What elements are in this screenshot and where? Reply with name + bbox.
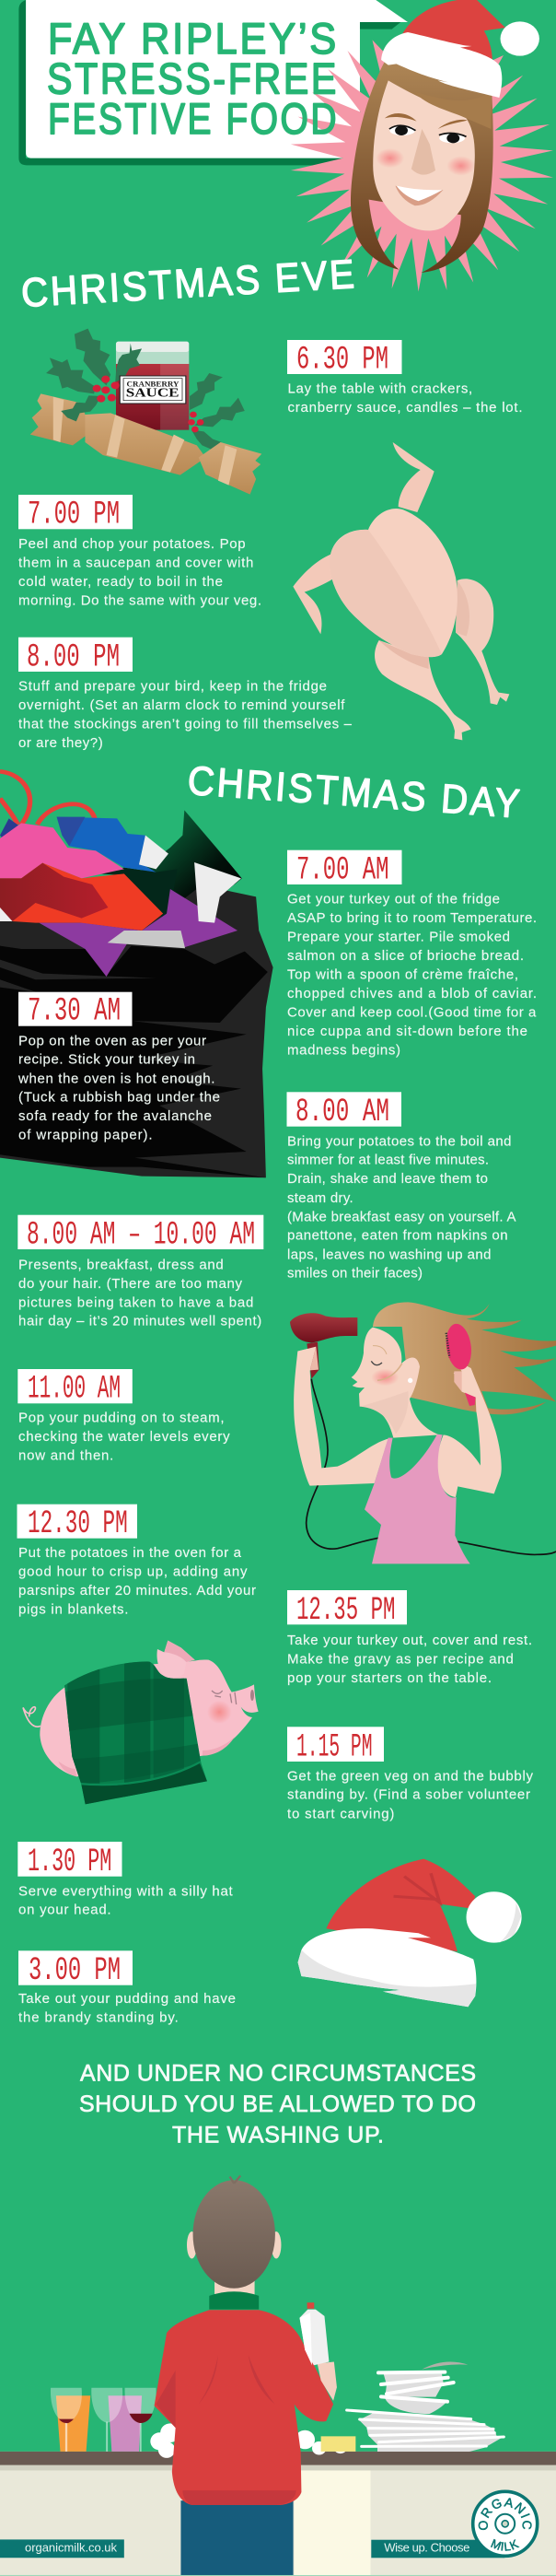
illustration: pig in a blanket (23, 1641, 259, 1809)
block: 12.30 PM (17, 1505, 256, 1617)
closing message (79, 2061, 476, 2148)
title: FAY RIPLEY’S (48, 14, 339, 63)
block: 7.00 PM: morning. Do the same with your veg. (18, 592, 261, 608)
holly and berries over cracker (61, 376, 203, 432)
block: 12.30 PM: Put the potatoes in the oven for a (18, 1545, 242, 1561)
ear (157, 1641, 195, 1678)
illustration: raw turkey (293, 442, 509, 740)
block: 8.00 PM: overnight. (Set an alarm clock to remind yourself (18, 697, 345, 713)
block: 8.00 AM: Bring your potatoes to the boil and (287, 1133, 512, 1149)
hair dryer (290, 1313, 357, 1379)
hat red (402, 0, 505, 62)
block: 7.00 PM: them in a saucepan and cover with (18, 555, 253, 570)
pig body (40, 1659, 259, 1776)
washing-up liquid bottle (299, 2302, 337, 2401)
counter and cupboards (0, 2452, 556, 2575)
block: 1.30 PM: on your head. (18, 1903, 111, 1918)
logo: Organic Milk: MILK (490, 2539, 519, 2551)
footer labels (25, 2540, 469, 2554)
block: 7.30 AM: (Tuck a rubbish bag under the (18, 1090, 220, 1106)
cheeks (376, 148, 404, 168)
block: 8.00 PM: that the stockings aren’t going to fill themselves – (18, 717, 353, 732)
schedule: Christmas Day, right column (287, 850, 537, 1821)
block: 7.00 AM: 7.00 AM (296, 851, 388, 888)
footer labels: Wise up. Choose (384, 2540, 469, 2554)
block: 6.30 PM: Lay the table with crackers, (287, 381, 472, 397)
illustration: Santa hat (298, 1859, 522, 2007)
block: 7.00 AM: ASAP to bring it to room Temperature. (287, 910, 537, 926)
face (373, 80, 475, 230)
block: 8.00 AM: simmer for at least five minutes. (287, 1153, 489, 1168)
closing message: THE WASHING UP. (172, 2122, 384, 2148)
title (47, 14, 339, 143)
block: 11.00 AM (17, 1369, 230, 1463)
block: 7.00 AM: madness begins) (287, 1042, 400, 1058)
block: 7.30 AM: Pop on the oven as per your (18, 1033, 206, 1048)
block: 8.00 AM to 10.00 AM: pictures being taken to have a bad (18, 1294, 253, 1310)
block: 7.30 AM: of wrapping paper). (18, 1128, 153, 1143)
title: FESTIVE FOOD (48, 94, 339, 143)
hair (373, 1302, 556, 1414)
title speech box (18, 0, 408, 165)
fringe (415, 92, 492, 129)
block: 11.00 AM: checking the water levels every (18, 1429, 230, 1445)
footer strip: web address (0, 2539, 124, 2558)
block: 6.30 PM: 6.30 PM (296, 341, 388, 378)
block: 1.15 PM: 1.15 PM (296, 1728, 372, 1765)
portrait: Fay Ripley in a Santa hat (291, 0, 553, 292)
block: 6.30 PM (287, 340, 523, 416)
illustration: cranberry sauce, holly and cracker (30, 329, 261, 495)
block: 8.00 AM to 10.00 AM (17, 1215, 263, 1329)
block: 8.00 AM: laps, leaves no washing up and (287, 1247, 492, 1262)
block: 8.00 AM: Drain, shake and leave them to (287, 1171, 488, 1187)
jar label (120, 376, 186, 404)
block: 8.00 AM to 10.00 AM: Presents, breakfast, dress and (18, 1257, 224, 1272)
block: 7.00 AM (287, 850, 537, 1058)
block: 8.00 AM: panettone, eaten from napkins on (287, 1228, 508, 1244)
block: 8.00 AM: smiles on their faces) (287, 1266, 423, 1282)
hair (351, 62, 493, 273)
block: 1.15 PM: Get the green veg on and the bubbly (287, 1768, 534, 1784)
jar label: SAUCE (126, 387, 180, 400)
soap suds (150, 2423, 347, 2458)
ribbon (0, 771, 95, 825)
block: 8.00 AM to 10.00 AM: hair day – it’s 20 minutes well spent) (18, 1314, 261, 1329)
footer labels: organicmilk.co.uk (25, 2540, 118, 2554)
block: 1.30 PM: 1.30 PM (28, 1844, 111, 1880)
block: 12.35 PM: pop your starters on the table. (287, 1670, 492, 1686)
bottom edge (0, 2575, 556, 2576)
block: 8.00 AM to 10.00 AM: 8.00 AM – 10.00 AM (27, 1216, 255, 1253)
block: 8.00 AM to 10.00 AM: do your hair. (There are too many (18, 1276, 243, 1292)
right arm (437, 1359, 502, 1497)
block: 8.00 AM: steam dry. (287, 1190, 353, 1206)
block: 1.15 PM: standing by. (Find a sober volunteer (287, 1787, 530, 1803)
schedule: Christmas Eve (18, 340, 523, 751)
block: 7.30 AM (17, 992, 220, 1143)
block: 7.00 AM: nice cuppa and sit-down before the (287, 1024, 527, 1039)
block: 8.00 AM: (Make breakfast easy on yourself. A (287, 1209, 515, 1224)
closing message: AND UNDER NO CIRCUMSTANCES (80, 2061, 476, 2087)
heading: Christmas Eve: CHRISTMAS EVE (20, 252, 358, 316)
face details (207, 1701, 232, 1724)
block: 3.00 PM: 3.00 PM (29, 1952, 121, 1989)
block: 12.35 PM: 12.35 PM (296, 1592, 396, 1629)
neck and face (352, 1328, 439, 1438)
block: 1.15 PM (287, 1727, 534, 1821)
illustration: woman drying her hair (290, 1302, 556, 1563)
header panel (18, 0, 553, 292)
block: 11.00 AM: now and then. (18, 1447, 113, 1463)
block: 12.30 PM: good hour to crisp up, adding any (18, 1563, 248, 1579)
block: 12.35 PM (287, 1590, 532, 1686)
man from behind (155, 2175, 333, 2575)
pink starburst (291, 40, 553, 292)
eyes (389, 125, 415, 135)
dish stack (347, 2361, 504, 2452)
block: 8.00 PM: Stuff and prepare your bird, keep in the fridge (18, 679, 327, 695)
block: 11.00 AM: Pop your pudding on to steam, (18, 1411, 225, 1426)
eye, ear and blush (371, 1346, 412, 1386)
block: 8.00 PM: 8.00 PM (27, 638, 120, 675)
block: 7.00 AM: Cover and keep cool.(Good time for a (287, 1004, 537, 1020)
wrapping paper (142, 810, 242, 912)
block: 8.00 PM (18, 638, 353, 751)
block: 7.00 AM: Top with a spoon of crème fraîche, (287, 967, 518, 983)
block: 12.35 PM: Take your turkey out, cover and rest. (287, 1633, 532, 1648)
block: 3.00 PM: Take out your pudding and have (18, 1991, 236, 2007)
cracker (30, 393, 261, 495)
block: 8.00 AM (287, 1092, 515, 1282)
eyebrows (385, 113, 417, 122)
hair brush (444, 1322, 476, 1406)
drinks (51, 2388, 156, 2452)
tartan blanket (64, 1661, 207, 1804)
logo: Organic Milk: ORGANIC (479, 2498, 532, 2530)
hat pom-pom (501, 21, 539, 56)
block: 7.00 PM (18, 495, 261, 608)
block: 7.00 PM: Peel and chop your potatoes. Pop (18, 536, 246, 552)
illustration: rubbish bag of wrapping paper (0, 771, 273, 1177)
block: 8.00 PM: or are they?) (18, 735, 103, 751)
title: STRESS-FREE (47, 54, 339, 103)
closing message: SHOULD YOU BE ALLOWED TO DO (79, 2091, 476, 2117)
block: 7.30 AM: 7.30 AM (28, 993, 121, 1030)
sponge (321, 2436, 355, 2452)
block: 11.00 AM: 11.00 AM (28, 1371, 121, 1408)
nose (411, 129, 435, 175)
mouth (395, 186, 444, 205)
heading: Christmas Day: CHRISTMAS DAY (186, 758, 524, 827)
hat band (381, 32, 502, 98)
bag (0, 887, 273, 1177)
block: 7.30 AM: when the oven is hot enough. (17, 1071, 214, 1086)
block: 7.00 PM: cold water, ready to boil in the (18, 574, 223, 590)
tank top (365, 1434, 470, 1563)
block: 12.30 PM: parsnips after 20 minutes. Add your (18, 1583, 256, 1598)
schedule: Christmas Day, left column (17, 992, 263, 2025)
block: 7.00 AM: Prepare your starter. Pile smoked (287, 930, 510, 945)
kitchen scene (0, 2175, 556, 2575)
block: 7.00 AM: Get your turkey out of the fridge (287, 892, 500, 907)
block: 12.30 PM: 12.30 PM (28, 1505, 128, 1542)
left arm (294, 1347, 388, 1486)
block: 7.00 AM: chopped chives and a blob of caviar. (287, 986, 537, 1001)
block: 7.00 PM: 7.00 PM (28, 497, 120, 533)
jar label: CRANBERRY (127, 380, 180, 388)
logo: Organic Milk (471, 2489, 539, 2558)
block: 8.00 AM: 8.00 AM (295, 1094, 389, 1130)
block: 7.00 AM: salmon on a slice of brioche bread. (287, 948, 524, 964)
block: 1.30 PM (17, 1842, 234, 1918)
block: 6.30 PM: cranberry sauce, candles – the lot. (287, 400, 523, 416)
block: 3.00 PM: the brandy standing by. (18, 2009, 179, 2025)
block: 12.30 PM: pigs in blankets. (18, 1601, 128, 1617)
footer strip: strapline (371, 2540, 504, 2558)
block: 7.30 AM: sofa ready for the avalanche (18, 1108, 212, 1124)
block: 1.15 PM: to start carving) (287, 1806, 394, 1821)
block: 12.35 PM: Make the gravy as per recipe and (287, 1651, 514, 1667)
block: 1.30 PM: Serve everything with a silly hat (18, 1883, 234, 1899)
tail (23, 1707, 41, 1727)
cord (307, 1379, 556, 1554)
block: 7.30 AM: recipe. Stick your turkey in (18, 1052, 195, 1068)
block: 3.00 PM (18, 1950, 236, 2025)
